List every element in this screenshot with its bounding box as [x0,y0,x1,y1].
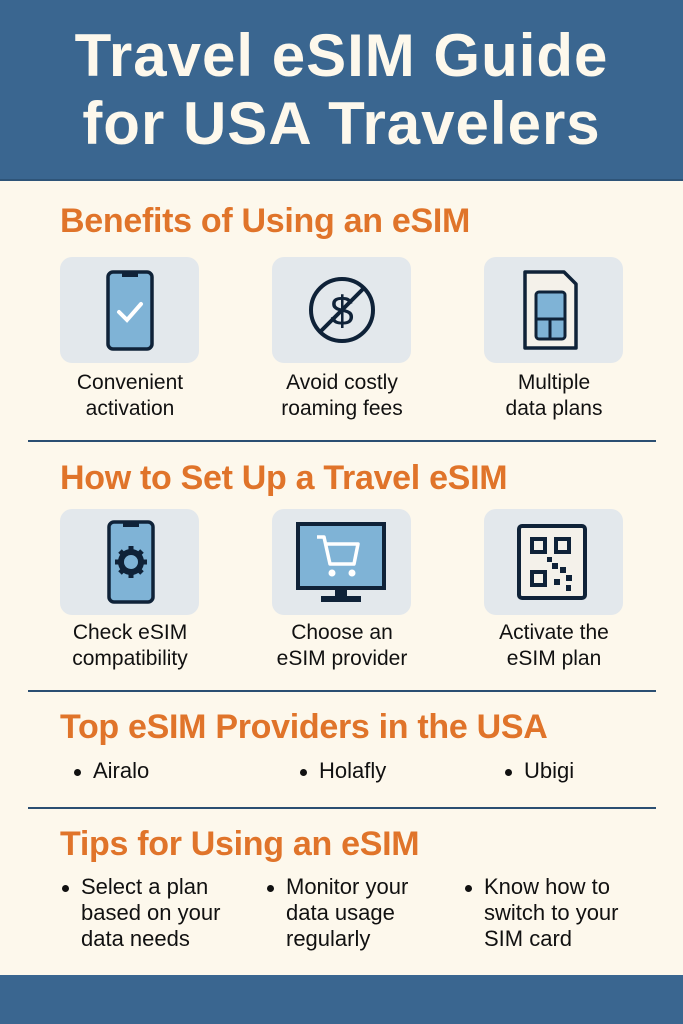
title [75,22,608,157]
tip 1: based on your [81,900,220,925]
title: Travel eSIM Guide [75,22,608,89]
tip 2 [286,874,408,952]
label: avoid roaming fees: roaming fees [281,397,403,420]
provider: Ubigi: Ubigi [524,758,574,783]
tips list [62,874,618,951]
label: avoid roaming fees [281,371,403,420]
label: convenient activation: activation [86,397,174,420]
label: multiple data plans: Multiple [518,371,590,394]
label: multiple data plans [506,371,602,420]
label: activate plan: Activate the [499,621,609,644]
heading: setup: How to Set Up a Travel eSIM [60,459,507,497]
tip 3: Know how to [484,874,610,899]
icon: monitor cart [272,509,411,615]
heading: tips: Tips for Using an eSIM [60,825,419,863]
title: for USA Travelers [82,90,601,157]
tip 2: regularly [286,926,370,951]
tip 2: data usage [286,900,395,925]
label: check compatibility [72,621,188,670]
provider: Holafly: Holafly [319,758,386,783]
tip 1 [81,874,220,952]
tip 1: data needs [81,926,190,951]
tip 1: Select a plan [81,874,208,899]
tip 3 [484,874,618,952]
icon: sim card [484,257,623,363]
label: convenient activation [77,371,183,420]
label: activate plan: eSIM plan [507,647,601,670]
label: check compatibility: Check eSIM [73,621,187,644]
label: choose provider [277,621,408,670]
icon: phone check [60,257,199,363]
label: convenient activation: Convenient [77,371,183,394]
label: multiple data plans: data plans [506,397,602,420]
label: avoid roaming fees: Avoid costly [286,371,398,394]
header banner [0,0,683,181]
tip 2: Monitor your [286,874,408,899]
heading: benefits: Benefits of Using an eSIM [60,202,470,240]
tip 3: switch to your [484,900,618,925]
icon: phone gear [60,509,199,615]
icon: no dollar: $ [330,287,354,334]
label: choose provider: Choose an [291,621,393,644]
tip 3: SIM card [484,926,572,951]
heading: providers: Top eSIM Providers in the USA [60,708,548,746]
icon: no dollar [272,257,411,363]
label: check compatibility: compatibility [72,647,188,670]
label: activate plan [499,621,609,670]
icon: qr code [484,509,623,615]
provider list [74,758,574,783]
provider: Airalo: Airalo [93,758,149,783]
label: choose provider: eSIM provider [277,647,407,670]
footer bar [0,975,683,1024]
